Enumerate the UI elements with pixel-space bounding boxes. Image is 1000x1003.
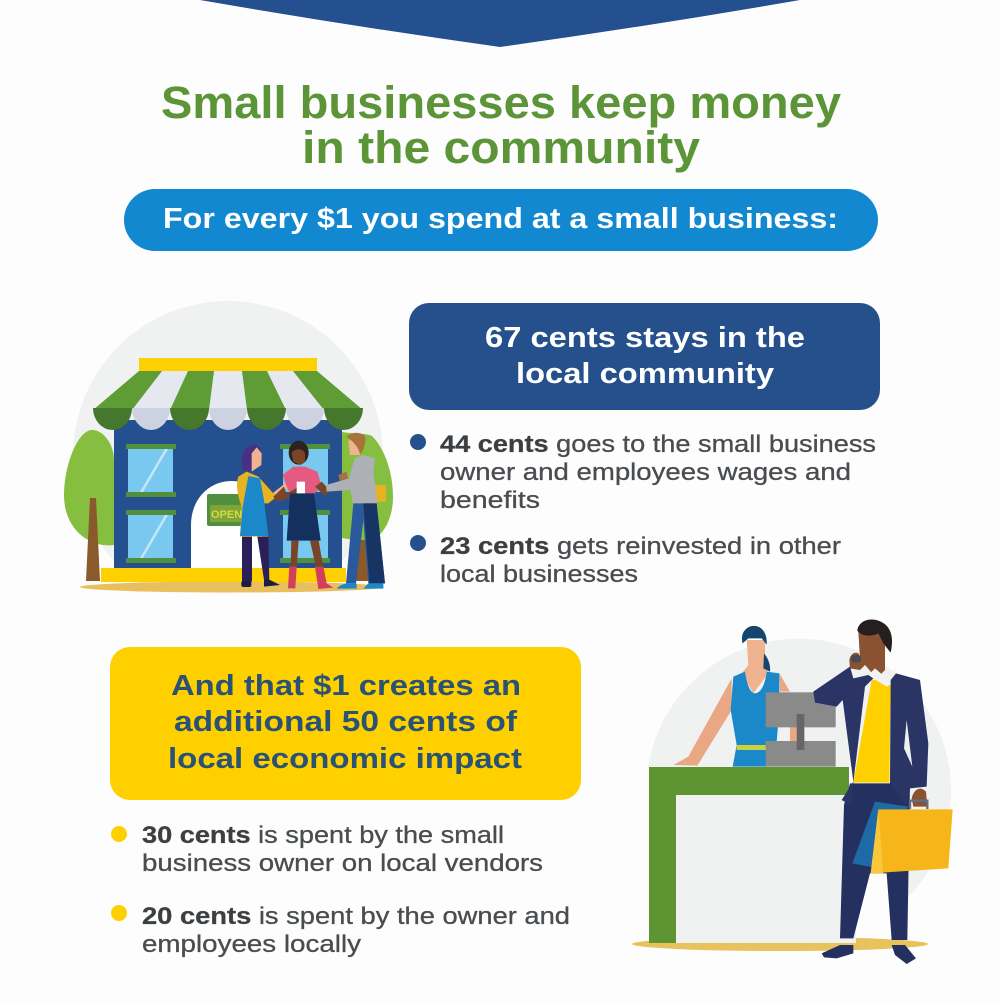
callout: 67 cents: 67 cents stays in the [485, 322, 805, 354]
bullet list: economic impact [111, 822, 570, 958]
bullet list: local community: 44 cents goes to the small business [440, 431, 876, 458]
illustration: storefront with people [64, 301, 393, 611]
bullet list: economic impact: 20 cents is spent by the owner and [142, 903, 570, 930]
bullet list: economic impact: business owner on local vendors [142, 850, 543, 877]
icon: cash register [766, 692, 836, 767]
subtitle pill [124, 189, 878, 251]
title: Small businesses keep money [161, 77, 841, 128]
bullet list: local community: local businesses [440, 561, 638, 588]
bullet list: local community: benefits [440, 487, 540, 514]
bullet list: local community: owner and employees wages and [440, 459, 851, 486]
callout: additional 50 cents: And that $1 creates an [171, 670, 521, 702]
icon: building [101, 420, 346, 582]
icon: ground shadow [632, 937, 928, 951]
icon: ground shadow [80, 582, 384, 592]
title [161, 77, 841, 173]
illustration: shop counter with customer [632, 620, 953, 964]
icon: right tree [342, 432, 393, 581]
top banner chevron [200, 0, 800, 47]
windows [126, 444, 330, 563]
icon: businessman [813, 620, 953, 964]
callout: 67 cents [409, 303, 880, 410]
icon: counter [649, 767, 856, 943]
bullet list: economic impact: employees locally [142, 931, 361, 958]
title: in the community [302, 122, 700, 173]
callout: additional 50 cents: local economic impact [168, 743, 522, 775]
bullet list: economic impact: 30 cents is spent by the small [142, 822, 504, 849]
icon: left tree [64, 430, 114, 581]
open sign [207, 494, 245, 526]
bullet list: local community: 23 cents gets reinvested in other [440, 533, 841, 560]
icon: woman in pink top [273, 441, 333, 589]
callout: 67 cents: local community [516, 358, 774, 390]
icon: cashier [673, 626, 797, 767]
open sign: OPEN [211, 509, 242, 521]
callout: additional 50 cents [110, 647, 581, 800]
icon: awning [93, 358, 363, 430]
subtitle pill: For every $1 you spend at a small business: [163, 203, 838, 235]
icon: woman in apron [237, 445, 293, 587]
icon: man in grey hoodie [326, 433, 386, 589]
callout: additional 50 cents: additional 50 cents of [174, 706, 517, 738]
bullet list: local community [410, 431, 876, 588]
